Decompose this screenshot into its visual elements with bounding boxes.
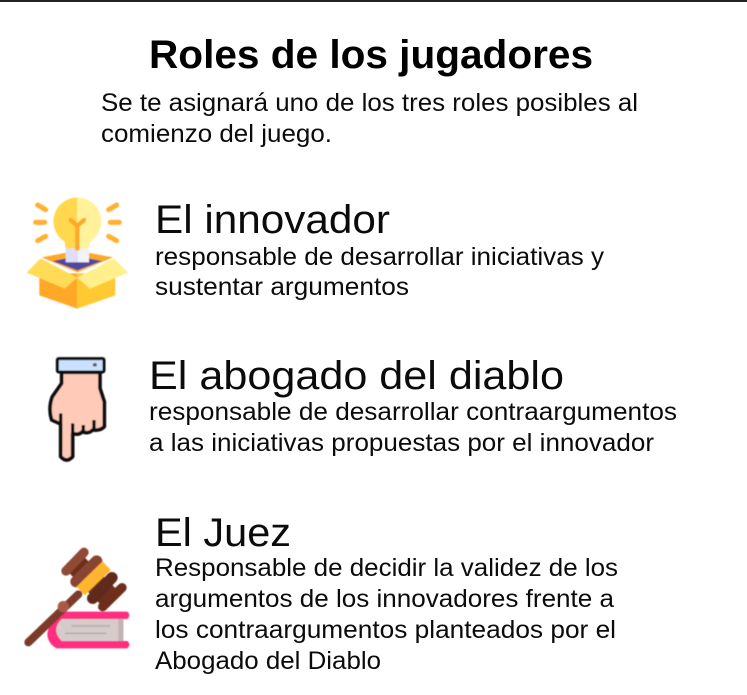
intro text xyxy=(101,89,638,148)
heading: el abogado del diablo: El abogado del diablo xyxy=(149,354,564,398)
heading: el innovador: El innovador xyxy=(155,198,390,242)
intro text: Se te asignará uno de los tres roles posibles al xyxy=(101,89,638,117)
description: el innovador: sustentar argumentos xyxy=(155,273,409,301)
description: el abogado del diablo: responsable de desarrollar contraargumentos xyxy=(149,398,677,426)
description: el juez: Responsable de decidir la validez de los xyxy=(155,554,618,582)
panel: el abogado del diablo xyxy=(50,354,677,460)
panel: el innovador xyxy=(27,197,605,309)
description: el juez xyxy=(155,554,618,675)
description: el juez: argumentos de los innovadores frente a xyxy=(155,585,614,613)
icon: hand pointing down xyxy=(50,359,104,460)
title: Roles de los jugadores xyxy=(149,33,593,77)
description: el abogado del diablo xyxy=(149,398,677,457)
description: el juez: Abogado del Diablo xyxy=(155,647,381,675)
description: el abogado del diablo: a las iniciativas propuestas por el innovador xyxy=(149,429,654,457)
heading: el juez: El Juez xyxy=(155,511,291,555)
description: el innovador xyxy=(155,243,605,301)
description: el juez: los contraargumentos planteados por el xyxy=(155,616,616,644)
panel: el juez xyxy=(28,511,618,675)
intro text: comienzo del juego. xyxy=(101,120,332,148)
description: el innovador: responsable de desarrollar iniciativas y xyxy=(155,243,605,271)
icon: light bulb in a box xyxy=(27,197,128,309)
icon: gavel on a book xyxy=(28,552,129,648)
